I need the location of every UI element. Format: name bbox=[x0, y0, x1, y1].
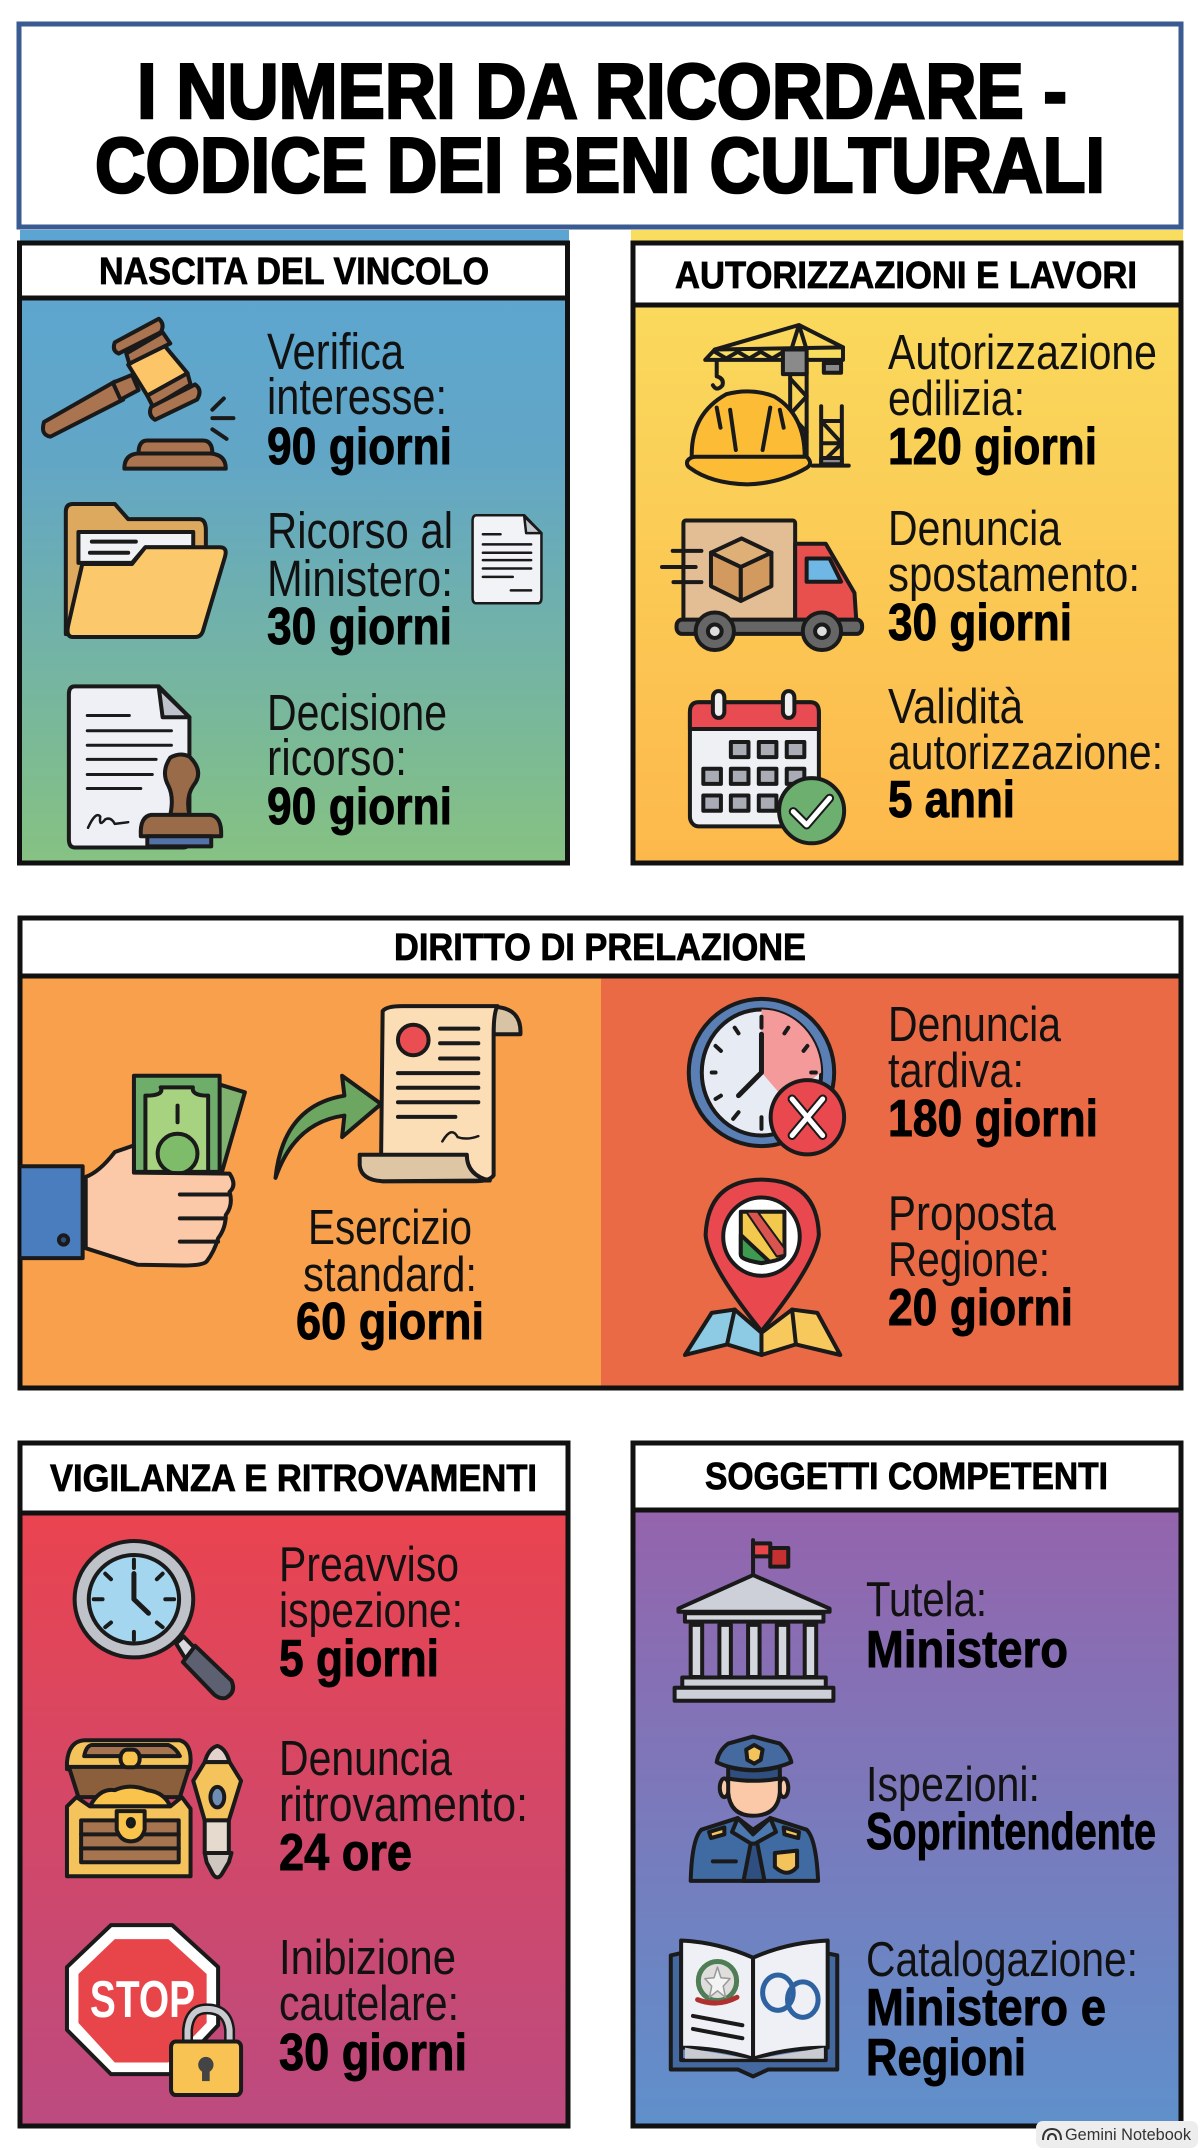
icon: ministry building bbox=[675, 1540, 833, 1701]
heading: vigilanza e ritrovamenti: VIGILANZA E RITROVAMENTI bbox=[50, 1458, 537, 1500]
text: inibizione cautelare: Inibizione bbox=[279, 1931, 456, 1985]
text: verifica interesse: Verifica bbox=[267, 323, 405, 380]
text: denuncia tardiva: tardiva: bbox=[888, 1044, 1024, 1098]
text: verifica interesse: interesse: bbox=[267, 368, 447, 425]
title: I NUMERI DA RICORDARE - bbox=[137, 47, 1067, 135]
text: proposta regione: Regione: bbox=[888, 1233, 1050, 1287]
text: denuncia spostamento bbox=[888, 502, 1140, 652]
heading: nascita del vincolo: NASCITA DEL VINCOLO bbox=[99, 251, 489, 293]
text: ricorso al ministero: 30 giorni bbox=[267, 598, 452, 656]
heading: soggetti competenti: SOGGETTI COMPETENTI bbox=[705, 1456, 1108, 1498]
title: CODICE DEI BENI CULTURALI bbox=[95, 121, 1105, 209]
heading: autorizzazioni e lavori: AUTORIZZAZIONI E LAVORI bbox=[675, 255, 1137, 297]
panel: nascita del vincolo bbox=[20, 230, 569, 863]
icon: magnifier with clock bbox=[75, 1541, 233, 1698]
title bbox=[19, 24, 1181, 227]
text: decisione ricorso: Decisione bbox=[267, 684, 447, 741]
text: denuncia ritrovamento: Denuncia bbox=[279, 1732, 453, 1786]
text: denuncia ritrovamento: ritrovamento: bbox=[279, 1778, 528, 1832]
text: denuncia spostamento: 30 giorni bbox=[888, 594, 1072, 652]
text: proposta regione: Proposta bbox=[888, 1187, 1057, 1241]
text: denuncia spostamento: Denuncia bbox=[888, 502, 1062, 556]
text: esercizio standard: standard: bbox=[303, 1248, 477, 1302]
icon: hand holding money bbox=[21, 1076, 245, 1265]
text: inibizione cautelare bbox=[279, 1931, 467, 2082]
text: validita autorizzazione: 5 anni bbox=[888, 771, 1015, 829]
text: validita autorizzazione: Validità bbox=[888, 680, 1024, 734]
text: tutela ministero: Tutela: bbox=[866, 1573, 987, 1627]
text: autorizzazione edilizia: Autorizzazione bbox=[888, 326, 1157, 380]
text: verifica interesse: 90 giorni bbox=[267, 418, 452, 476]
icon: treasure chest and lantern bbox=[67, 1740, 241, 1877]
text: inibizione cautelare: cautelare: bbox=[279, 1977, 459, 2031]
text: preavviso ispezione: 5 giorni bbox=[279, 1630, 439, 1688]
icon: document bbox=[473, 515, 541, 603]
icon: map pin with region shield bbox=[685, 1180, 840, 1355]
text: decisione ricorso: ricorso: bbox=[267, 729, 407, 786]
icon: scroll contract bbox=[360, 1006, 520, 1181]
text: denuncia ritrovamento bbox=[279, 1732, 528, 1882]
panel: autorizzazioni e lavori bbox=[631, 230, 1183, 863]
text: catalogazione bbox=[866, 1933, 1138, 2087]
watermark badge: Gemini Notebook bbox=[1065, 2125, 1191, 2144]
text: ricorso al ministero bbox=[267, 502, 453, 656]
icon: officer bbox=[691, 1737, 818, 1881]
text: esercizio standard: 60 giorni bbox=[296, 1293, 484, 1351]
text: tutela ministero: Ministero bbox=[866, 1621, 1068, 1679]
text: ricorso al ministero: Ricorso al bbox=[267, 502, 453, 559]
icon: stop sign with padlock: STOP bbox=[90, 1971, 195, 2029]
text: denuncia spostamento: spostamento: bbox=[888, 548, 1140, 602]
text: inibizione cautelare: 30 giorni bbox=[279, 2024, 467, 2082]
panel: soggetti competenti bbox=[633, 1443, 1181, 2126]
text: esercizio standard: Esercizio bbox=[308, 1201, 472, 1255]
text: catalogazione: Regioni bbox=[866, 2029, 1026, 2087]
panel: vigilanza e ritrovamenti bbox=[20, 1443, 568, 2126]
icon: folder bbox=[66, 504, 226, 637]
heading: diritto di prelazione: DIRITTO DI PRELAZIONE bbox=[394, 927, 806, 969]
text: denuncia tardiva: 180 giorni bbox=[888, 1090, 1098, 1148]
text: ispezioni soprintendente: Ispezioni: bbox=[866, 1758, 1040, 1812]
text: catalogazione: Ministero e bbox=[866, 1979, 1106, 2037]
text: ricorso al ministero: Ministero: bbox=[267, 550, 453, 607]
text: autorizzazione edilizia: edilizia: bbox=[888, 372, 1025, 426]
icon: crane and helmet bbox=[687, 325, 849, 484]
text: autorizzazione edilizia bbox=[888, 326, 1157, 476]
text: preavviso ispezione: Preavviso bbox=[279, 1538, 459, 1592]
text: proposta regione bbox=[888, 1187, 1073, 1337]
text: decisione ricorso: 90 giorni bbox=[267, 778, 452, 836]
panel: diritto di prelazione bbox=[20, 918, 1181, 1388]
icon: calendar with check bbox=[690, 691, 844, 843]
icon: document with stamp bbox=[69, 686, 221, 847]
text: verifica interesse bbox=[267, 323, 452, 476]
watermark badge bbox=[1036, 2121, 1198, 2148]
text: validita autorizzazione bbox=[888, 680, 1163, 829]
text: ispezioni soprintendente bbox=[866, 1758, 1156, 1861]
text: denuncia tardiva: Denuncia bbox=[888, 998, 1062, 1052]
text: denuncia tardiva bbox=[888, 998, 1098, 1148]
icon: delivery truck bbox=[662, 521, 862, 650]
text: autorizzazione edilizia: 120 giorni bbox=[888, 418, 1097, 476]
icon: clock with cross bbox=[689, 999, 844, 1154]
text: esercizio standard bbox=[296, 1201, 484, 1351]
icon: open book with emblems bbox=[671, 1940, 837, 2076]
text: preavviso ispezione: ispezione: bbox=[279, 1584, 463, 1638]
text: preavviso ispezione bbox=[279, 1538, 463, 1688]
text: proposta regione: 20 giorni bbox=[888, 1279, 1073, 1337]
text: denuncia ritrovamento: 24 ore bbox=[279, 1824, 412, 1882]
icon: gavel bbox=[43, 319, 233, 469]
icon: arrow bbox=[276, 1076, 381, 1178]
text: tutela ministero bbox=[866, 1573, 1068, 1679]
icon: stop sign with padlock bbox=[67, 1925, 241, 2095]
text: decisione ricorso bbox=[267, 684, 452, 836]
text: catalogazione: Catalogazione: bbox=[866, 1933, 1138, 1987]
